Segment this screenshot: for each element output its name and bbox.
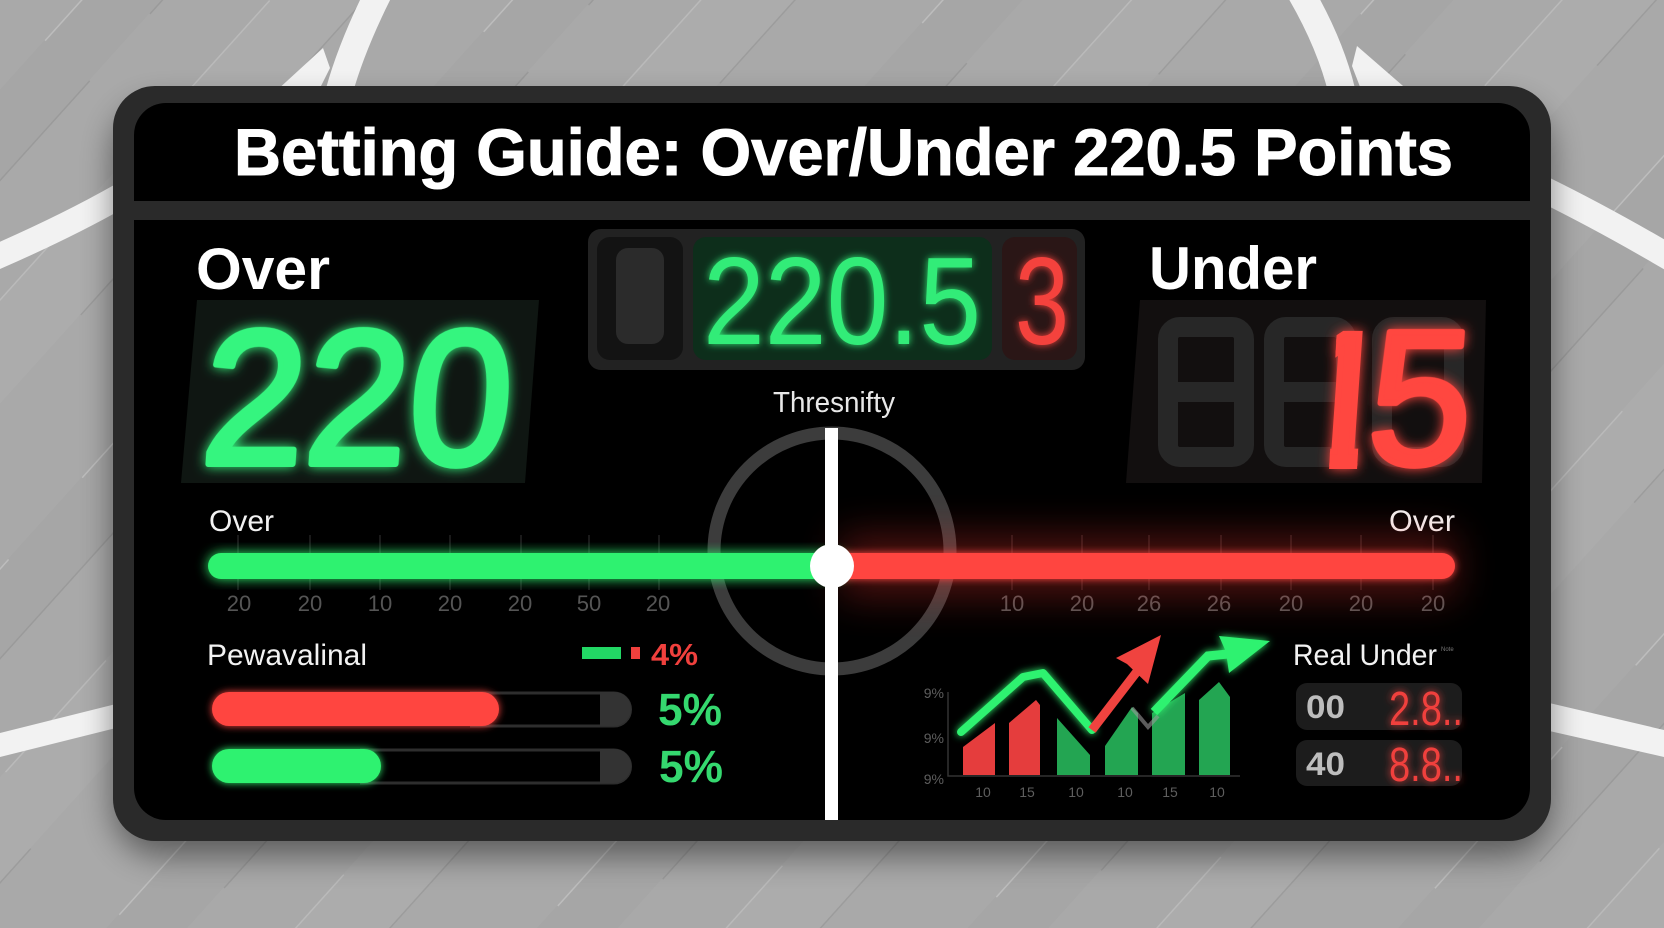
row 1: 2.8.. — [1389, 683, 1463, 736]
right scale labels: 20 — [1421, 591, 1445, 616]
header area — [134, 103, 1530, 201]
y axis labels: 9% — [924, 730, 944, 746]
right scale labels: 20 — [1279, 591, 1303, 616]
red cell — [1002, 237, 1077, 360]
court line: left curve — [0, 196, 120, 264]
left label: Over: Over — [209, 505, 274, 538]
unlit cell — [597, 237, 683, 360]
scoreboard panel — [113, 86, 1551, 841]
red under bar — [820, 553, 1455, 579]
right scale labels: 10 — [1000, 591, 1024, 616]
red digit 5: 5 — [1362, 290, 1480, 505]
left scale labels: 20 — [508, 591, 532, 616]
centre line display — [588, 229, 1085, 371]
y axis labels: 9% — [924, 685, 944, 701]
title: Betting Guide: Over/Under 220.5 Points — [234, 115, 1453, 189]
x axis labels: 10 — [1068, 784, 1084, 800]
legend red swatch — [631, 647, 640, 659]
x axis labels: 10 — [1117, 784, 1133, 800]
red bar — [212, 692, 499, 726]
row 1 — [1296, 683, 1463, 736]
left scale labels: 50 — [577, 591, 601, 616]
panel label: Real Under — [1293, 639, 1437, 672]
red columns — [963, 700, 1040, 775]
panel shadow — [113, 104, 1551, 856]
green bar — [212, 749, 381, 783]
right scale ticks — [1012, 535, 1433, 590]
threshold knob — [810, 544, 854, 588]
green arrow — [1154, 636, 1270, 712]
x axis labels — [975, 784, 1225, 800]
court line: top-right arc — [1298, 0, 1342, 92]
unlit digit cells — [1168, 327, 1454, 457]
court line: top-left wedge — [275, 48, 330, 92]
right scale labels: 26 — [1207, 591, 1231, 616]
right scale labels: 20 — [1070, 591, 1094, 616]
left scale labels: 20 — [438, 591, 462, 616]
row 2: 8.8.. — [1389, 739, 1463, 792]
under score display — [1126, 300, 1486, 483]
green columns — [1057, 682, 1230, 775]
small annotation: Note — [1441, 647, 1454, 653]
green trend line — [961, 673, 1092, 732]
threshold gauge — [208, 428, 1455, 820]
left scale labels: 20 — [298, 591, 322, 616]
x axis labels: 15 — [1162, 784, 1178, 800]
percentage panel — [207, 637, 723, 792]
x axis labels: 15 — [1019, 784, 1035, 800]
green cell — [693, 237, 992, 360]
display backing — [181, 300, 539, 483]
row 2 — [1296, 739, 1463, 792]
panel frame — [113, 86, 1551, 841]
x axis labels: 10 — [975, 784, 991, 800]
y axis labels — [924, 685, 944, 787]
green digits: 220 — [196, 290, 520, 505]
bar track 2 — [360, 749, 631, 783]
court line: lower right — [1545, 702, 1664, 757]
row 2: 40 — [1306, 746, 1345, 782]
bar track 1 — [470, 692, 631, 726]
axes — [948, 692, 1240, 776]
grey connector — [1132, 708, 1158, 727]
heading: Over: Over — [196, 237, 330, 302]
heading: Under: Under — [1149, 235, 1317, 302]
line value: 220.5 — [703, 233, 981, 371]
left scale labels: 20 — [646, 591, 670, 616]
value 1: 5% — [658, 684, 722, 735]
right scale labels: 26 — [1137, 591, 1161, 616]
over score display — [181, 290, 539, 505]
gauge ring — [714, 433, 950, 669]
legend green swatch — [582, 647, 621, 659]
court line: top-right wedge — [1352, 46, 1410, 92]
display backing — [1126, 300, 1486, 483]
court line: top-left arc — [339, 0, 381, 92]
x axis labels: 10 — [1209, 784, 1225, 800]
court line: lower left — [0, 703, 120, 757]
right scale labels — [1000, 591, 1445, 616]
real under panel — [1293, 639, 1463, 792]
green over bar — [208, 553, 848, 579]
threshold label: Thresnifty — [773, 387, 895, 419]
red arrow — [1092, 635, 1161, 730]
unlit segments — [616, 248, 664, 344]
left scale labels — [227, 591, 670, 616]
centre threshold line — [825, 428, 838, 820]
trend chart — [924, 635, 1270, 800]
court line: right curve — [1545, 190, 1664, 266]
left scale ticks — [238, 535, 659, 590]
right label: Over: Over — [1389, 505, 1455, 538]
y axis labels: 9% — [924, 771, 944, 787]
legend value: 4% — [651, 637, 698, 672]
panel label: Pewavalinal — [207, 639, 367, 672]
right scale labels: 20 — [1349, 591, 1373, 616]
red digit: 3 — [1015, 233, 1069, 371]
body area — [134, 220, 1530, 820]
red digit 1: 1 — [1282, 292, 1404, 507]
display frame — [588, 229, 1085, 370]
left scale labels: 20 — [227, 591, 251, 616]
row 1: 00 — [1306, 689, 1345, 725]
value 2: 5% — [659, 741, 723, 792]
left scale labels: 10 — [368, 591, 392, 616]
red glow — [840, 535, 1455, 597]
